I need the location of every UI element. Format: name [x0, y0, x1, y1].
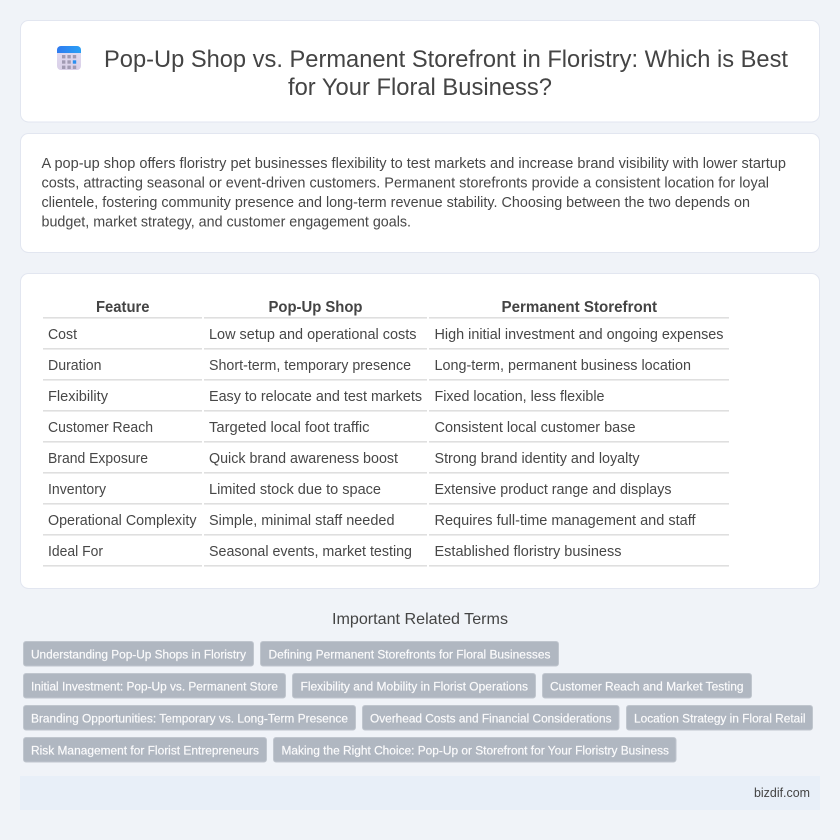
- table row: inventory: [48, 482, 672, 498]
- table row: operational complexity: [48, 513, 696, 529]
- table row: duration: [48, 358, 691, 374]
- tag: [24, 706, 356, 730]
- table header row: Feature: [96, 299, 150, 316]
- title: Pop-Up Shop vs. Permanent Storefront in Floristry: Which is Best: [104, 46, 788, 73]
- heading: important related terms: Important Related Terms: [332, 611, 508, 628]
- text block: intro: A pop-up shop offers floristry pet businesses flexibility to test markets and increase brand visibility with lower startup: [42, 156, 786, 172]
- tag: [24, 674, 286, 698]
- table row: cost: High initial investment and ongoing expenses: [434, 327, 724, 343]
- tag: [362, 706, 619, 730]
- tag: [292, 674, 536, 698]
- table row: brand exposure: Brand Exposure: [48, 451, 148, 467]
- title: for Your Floral Business?: [288, 74, 552, 101]
- tag: Flexibility and Mobility in Florist Operations: [300, 680, 528, 694]
- panel: title header: [20, 20, 820, 122]
- table row: duration: Duration: [48, 358, 102, 374]
- tag: [24, 642, 254, 666]
- table row: flexibility: [48, 389, 604, 405]
- tag: Defining Permanent Storefronts for Floral Businesses: [268, 648, 550, 662]
- table row: flexibility: Easy to relocate and test markets: [209, 389, 422, 405]
- panel: comparison table: [20, 274, 820, 588]
- panel: intro paragraph: [20, 134, 820, 252]
- table row: operational complexity: Simple, minimal staff needed: [209, 513, 394, 529]
- footer: bizdif.com: [754, 785, 810, 800]
- table row: inventory: Inventory: [48, 482, 107, 498]
- tag: Location Strategy in Floral Retail: [634, 712, 806, 726]
- table row: cost: Cost: [48, 327, 77, 343]
- table row: cost: [48, 327, 724, 343]
- tag: [24, 738, 266, 762]
- table row: duration: Long-term, permanent business location: [434, 358, 691, 374]
- text block: intro: budget, market strategy, and customer engagement goals.: [42, 214, 411, 230]
- tag: [260, 642, 558, 666]
- table header row: Permanent Storefront: [502, 299, 658, 316]
- table row: ideal for: Seasonal events, market testing: [209, 544, 412, 560]
- table row: operational complexity: Requires full-time management and staff: [434, 513, 696, 529]
- text block: intro: costs, attracting seasonal or event-driven customers. Permanent storefronts provide a consistent location for loyal: [42, 176, 769, 192]
- table header row: [96, 299, 658, 316]
- tag: Making the Right Choice: Pop-Up or Storefront for Your Floristry Business: [282, 744, 669, 758]
- table row: brand exposure: [48, 451, 640, 467]
- table row: ideal for: Established floristry business: [434, 544, 622, 560]
- tag: Initial Investment: Pop-Up vs. Permanent Store: [31, 680, 278, 694]
- tag: Branding Opportunities: Temporary vs. Long-Term Presence: [31, 712, 348, 726]
- tag: Risk Management for Florist Entrepreneurs: [31, 744, 259, 758]
- table header row: Pop-Up Shop: [268, 299, 363, 316]
- tag: Overhead Costs and Financial Considerations: [370, 712, 612, 726]
- table row: customer reach: Targeted local foot traffic: [209, 420, 370, 436]
- tag: [542, 674, 752, 698]
- tag: [626, 706, 812, 730]
- table row: ideal for: Ideal For: [48, 544, 103, 560]
- table row: cost: Low setup and operational costs: [209, 327, 416, 343]
- table row: brand exposure: Quick brand awareness boost: [209, 451, 398, 467]
- table row: flexibility: Fixed location, less flexible: [434, 389, 604, 405]
- footer: [20, 776, 820, 810]
- table row: operational complexity: Operational Complexity: [48, 513, 197, 529]
- tag: [274, 738, 676, 762]
- table row: inventory: Limited stock due to space: [209, 482, 381, 498]
- table row: customer reach: Consistent local customer base: [434, 420, 636, 436]
- table row: duration: Short-term, temporary presence: [209, 358, 411, 374]
- text block: intro: clientele, fostering community presence and long-term revenue stability. Choosing between the two depends on: [42, 195, 750, 211]
- tag: Customer Reach and Market Testing: [550, 680, 744, 694]
- text block: intro: [42, 156, 786, 230]
- table row: inventory: Extensive product range and displays: [434, 482, 672, 498]
- table row: customer reach: [48, 420, 636, 436]
- tag: Understanding Pop-Up Shops in Floristry: [31, 648, 247, 662]
- icon: calendar: [57, 46, 81, 70]
- table row: ideal for: [48, 544, 622, 560]
- table row: customer reach: Customer Reach: [48, 420, 153, 436]
- title: [104, 46, 788, 101]
- tag list: related terms: [24, 642, 812, 762]
- table row: flexibility: Flexibility: [48, 389, 109, 405]
- table row: brand exposure: Strong brand identity and loyalty: [434, 451, 640, 467]
